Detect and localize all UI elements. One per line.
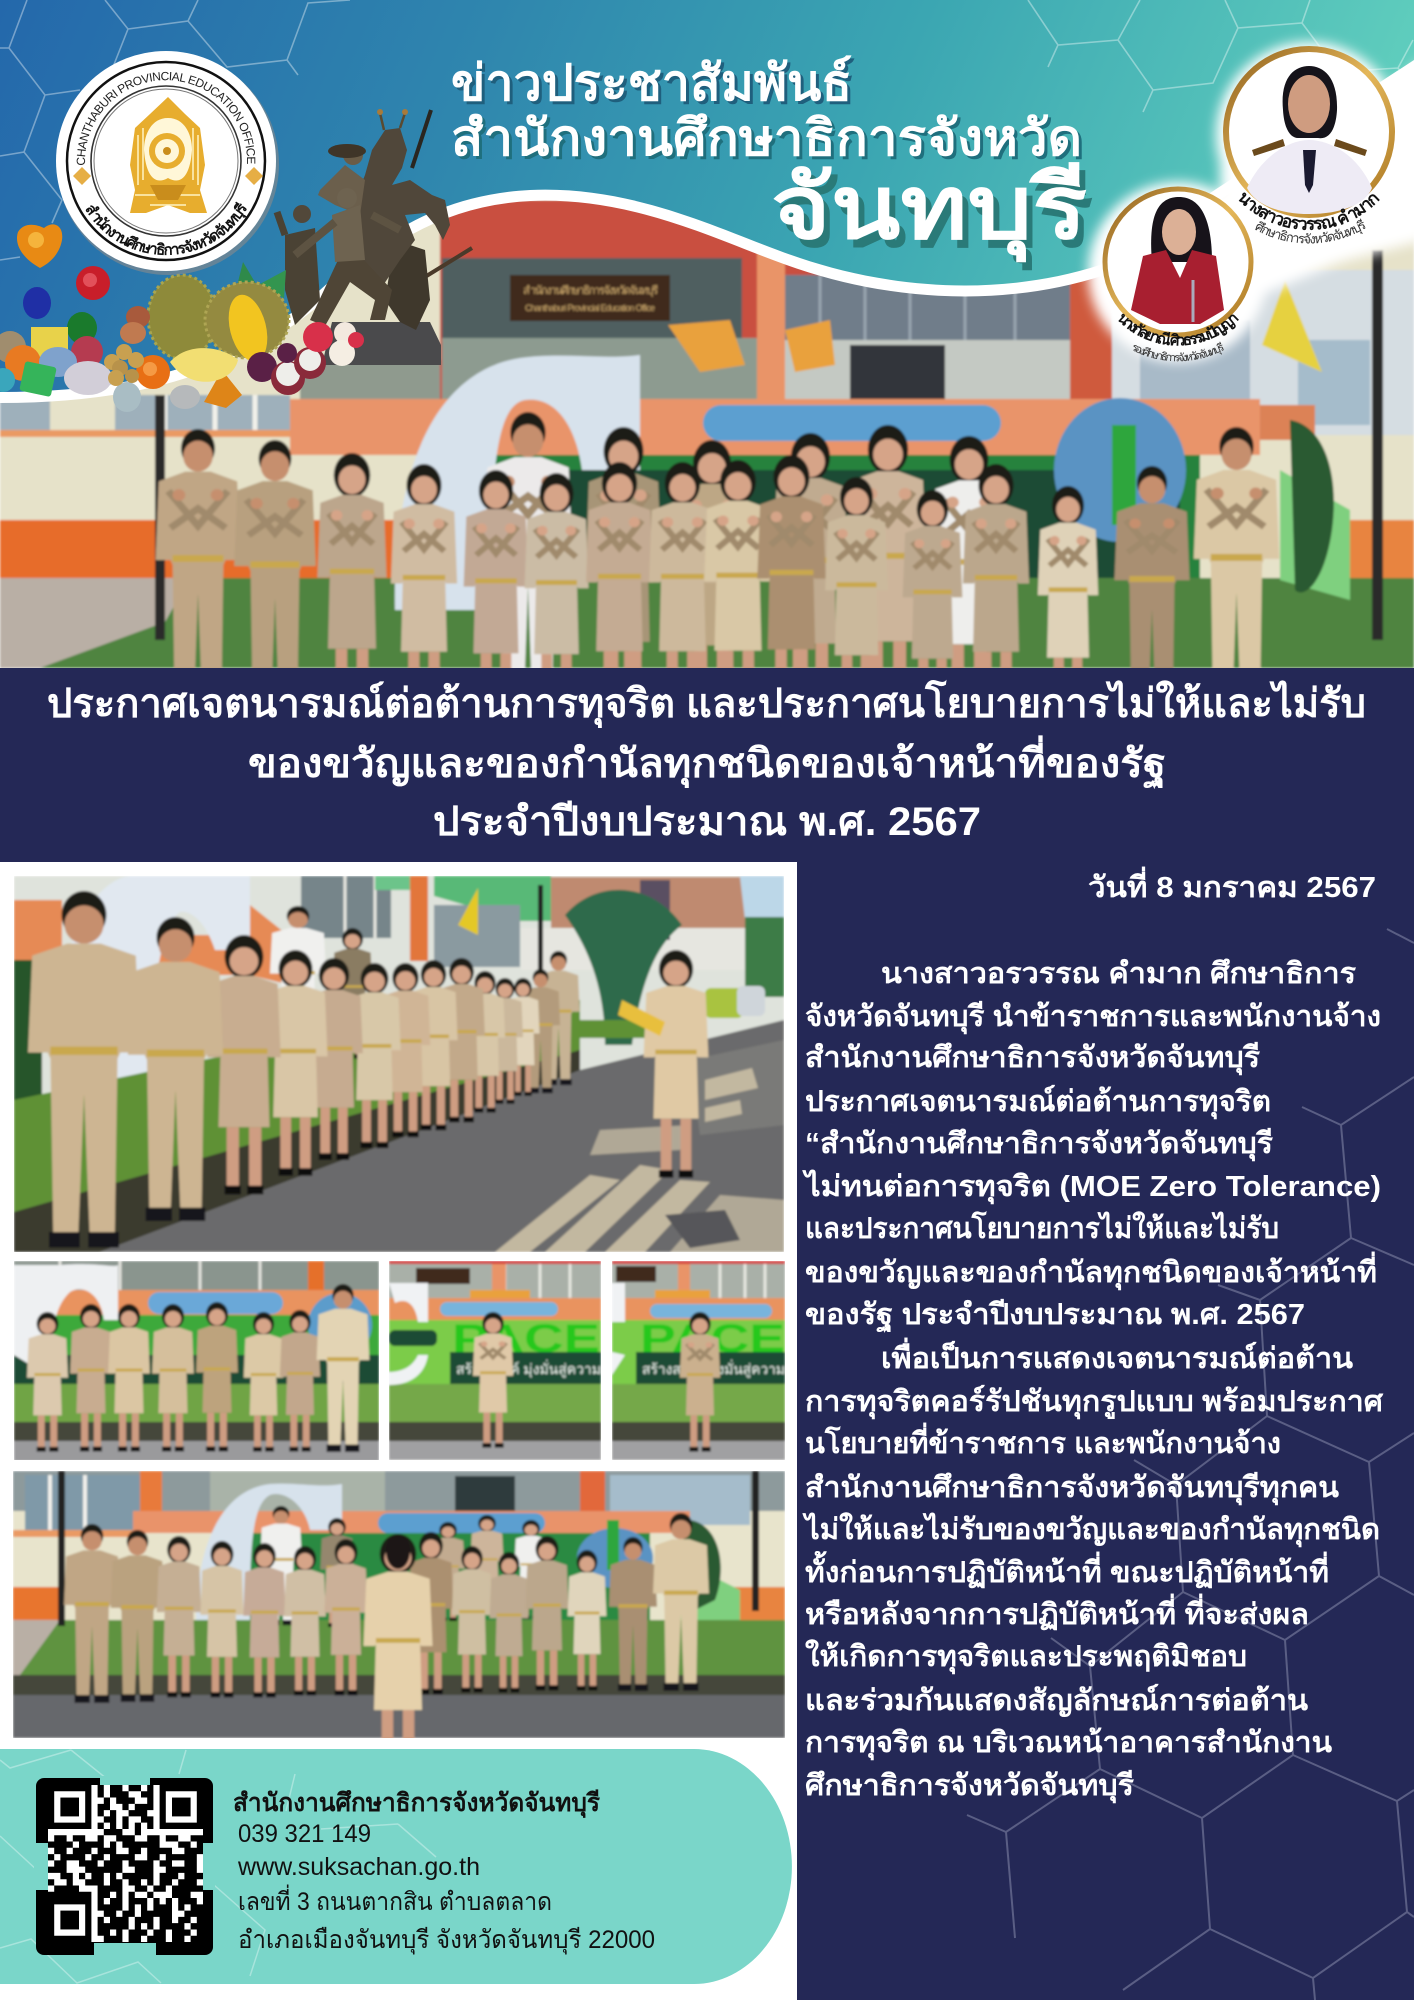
article body: ของรัฐ ประจำปีงบประมาณ พ.ศ. 2567 <box>805 1299 1305 1333</box>
article body: สำนักงานศึกษาธิการจังหวัดจันทบุรีทุกคน <box>805 1472 1339 1505</box>
name: officer: นางสาวอรวรรณ คำมาก <box>1238 192 1380 230</box>
title line 1: ประกาศเจตนารมณ์ต่อต้านการทุจริต และประกาศนโยบายการไม่ให้และไม่รับ <box>47 680 1366 729</box>
footer contact text: www.suksachan.go.th <box>237 1853 480 1881</box>
icon: gems <box>0 224 242 412</box>
panel: article text <box>797 862 1414 2000</box>
date: วันที่ 8 มกราคม 2567 <box>1088 866 1376 904</box>
portrait: deputy provincial education officer <box>1105 189 1251 335</box>
building sign <box>510 275 670 321</box>
photo: eight staff in front of PACE sign <box>14 1261 379 1460</box>
article body: จังหวัดจันทบุรี นำข้าราชการและพนักงานจ้าง <box>805 1001 1381 1034</box>
QR code <box>34 1776 215 1957</box>
back row of staff <box>484 412 1006 718</box>
heading line 2: สำนักงานศึกษาธิการจังหวัด <box>451 110 1082 166</box>
portrait: provincial education officer <box>1226 49 1392 215</box>
photo: officer with crossed arms in front of PACE sign <box>389 1261 601 1460</box>
photo: staff lined up facing the officer <box>13 1471 785 1738</box>
logo diamonds <box>73 167 263 185</box>
header white wave <box>0 0 1414 392</box>
article body: ไม่ให้และไม่รับของขวัญและของกำนัลทุกชนิด <box>802 1512 1380 1547</box>
title: deputy: รองศึกษาธิการจังหวัดจันทบุรี <box>1133 342 1224 362</box>
article body: การทุจริตคอร์รัปชันทุกรูปแบบ พร้อมประกาศ <box>805 1384 1384 1419</box>
article body: การทุจริต ณ บริเวณหน้าอาคารสำนักงาน <box>805 1727 1332 1760</box>
article body: ของขวัญและของกำนัลทุกชนิดของเจ้าหน้าที่ <box>805 1251 1377 1290</box>
white letter C <box>395 355 640 610</box>
title line 3: ประจำปีงบประมาณ พ.ศ. 2567 <box>433 800 981 844</box>
heading line 1: ข่าวประชาสัมพันธ์ <box>454 58 855 114</box>
heading line 1: ข่าวประชาสัมพันธ์ <box>451 55 852 111</box>
article body: ให้เกิดการทุจริตและประพฤติมิชอบ <box>805 1639 1247 1674</box>
title line 2: ของขวัญและของกำนัลทุกชนิดของเจ้าหน้าที่ของรัฐ <box>248 735 1166 790</box>
yellow flag <box>1262 280 1322 372</box>
header gradient panel with hexagon pattern <box>0 0 1414 392</box>
photo: second officer with crossed arms in front of PACE sign: สร้างสรรค์ มุ่งมั่นสู่ความ <box>642 1360 785 1378</box>
footer contact text: 039 321 149 <box>238 1820 371 1848</box>
photo: officer with crossed arms in front of PACE sign: สร้างสรรค์ มุ่งมั่นสู่ความ <box>456 1360 601 1378</box>
building sign: สำนักงานศึกษาธิการจังหวัดจันทบุรี <box>523 284 658 297</box>
white glow behind portraits <box>1088 42 1414 362</box>
logo: Chanthaburi provincial education office seal <box>56 51 279 275</box>
heading line 2: สำนักงานศึกษาธิการจังหวัด <box>454 113 1085 169</box>
article body: ไม่ทนต่อการทุจริต (MOE Zero Tolerance) <box>802 1169 1381 1204</box>
photo: officer reading declaration to staff <box>14 876 784 1252</box>
panel: contact footer <box>0 1749 792 1984</box>
statue of King Taksin <box>277 109 472 365</box>
portrait names on arcs <box>1118 192 1380 362</box>
logo ring text thai: สำนักงานศึกษาธิการจังหวัดจันทบุรี <box>86 202 247 256</box>
heading: public relations news <box>451 55 1093 271</box>
article body: และร่วมกันแสดงสัญลักษณ์การต่อต้าน <box>805 1683 1308 1718</box>
article body: เพื่อเป็นการแสดงเจตนารมณ์ต่อต้าน <box>881 1337 1353 1375</box>
article body: ศึกษาธิการจังหวัดจันทบุรี <box>805 1770 1134 1803</box>
footer contact text: อำเภอเมืองจันทบุรี จังหวัดจันทบุรี 22000 <box>238 1926 655 1955</box>
title band <box>0 668 1414 862</box>
icon: durian <box>148 262 289 382</box>
sign letters: PACE <box>452 1317 600 1361</box>
heading province name: จันทบุรี <box>771 161 1087 263</box>
article body <box>802 958 1384 1803</box>
front row of staff with crossed arms <box>156 427 1279 718</box>
fruits and gems <box>0 224 364 412</box>
article body: “สำนักงานศึกษาธิการจังหวัดจันทบุรี <box>805 1128 1273 1161</box>
sign letters: PACE <box>640 1317 785 1361</box>
blue circle letter <box>1054 398 1186 542</box>
footer contact text: สำนักงานศึกษาธิการจังหวัดจันทบุรี <box>233 1789 601 1819</box>
article body: ทั้งก่อนการปฏิบัติหน้าที่ ขณะปฏิบัติหน้าที่ <box>805 1550 1329 1589</box>
logo ring text english: CHANTHABURI PROVINCIAL EDUCATION OFFICE <box>76 72 256 165</box>
building sign: Chanthaburi Provincial Education Office <box>525 303 655 313</box>
poster sign blue <box>703 405 1001 441</box>
photo: second officer with crossed arms in front of PACE sign <box>612 1261 785 1460</box>
icon: salak and longan <box>104 306 150 386</box>
header photo: staff group in front of the building <box>0 190 1414 718</box>
name: deputy: นางกัลยาณี ศิวธรรมปัญญา <box>1118 314 1239 346</box>
article body: หรือหลังจากการปฏิบัติหน้าที่ ที่จะส่งผล <box>805 1593 1309 1631</box>
article body: นโยบายที่ข้าราชการ และพนักงานจ้าง <box>805 1422 1281 1460</box>
article body: นางสาวอรวรรณ คำมาก ศึกษาธิการ <box>881 958 1356 990</box>
article body: และประกาศนโยบายการไม่ให้และไม่รับ <box>805 1210 1279 1245</box>
emblem <box>130 97 207 213</box>
article body: สำนักงานศึกษาธิการจังหวัดจันทบุรี <box>805 1042 1260 1075</box>
footer contact text: เลขที่ 3 ถนนตากสิน ตำบลตลาด <box>238 1884 552 1916</box>
footer contact text <box>233 1789 655 1955</box>
article body: ประกาศเจตนารมณ์ต่อต้านการทุจริต <box>805 1084 1271 1119</box>
heading province name: จันทบุรี <box>777 169 1093 271</box>
title: officer: ศึกษาธิการจังหวัดจันทบุรี <box>1255 218 1366 244</box>
icon: mangosteen and rambutan <box>247 322 364 395</box>
